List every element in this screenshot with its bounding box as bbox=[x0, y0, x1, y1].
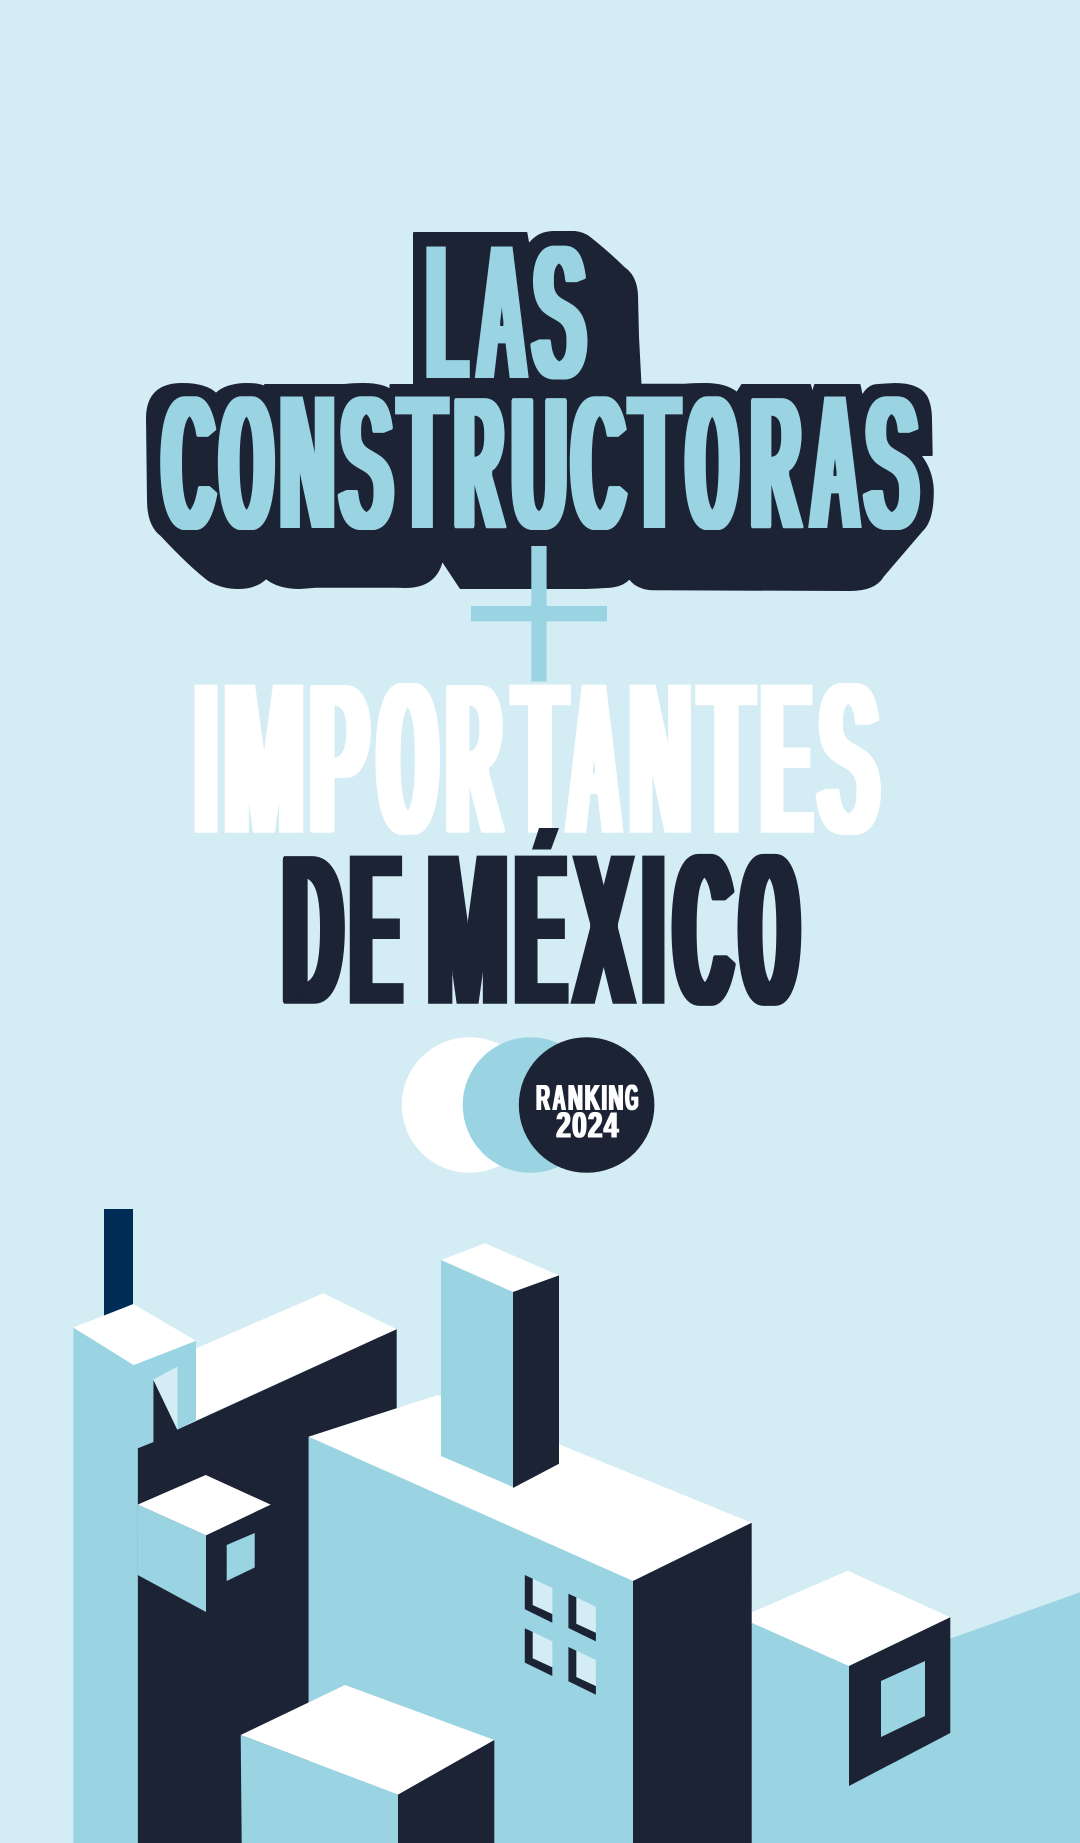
dark back building bbox=[138, 1329, 397, 1843]
title block: O bbox=[740, 822, 798, 1068]
title line: CONSTRUCTORAS: C bbox=[571, 366, 625, 585]
ranking badge: G bbox=[625, 1077, 638, 1118]
title line: LAS: A bbox=[478, 202, 526, 422]
plus sign bbox=[471, 546, 607, 682]
front building right face bbox=[398, 1740, 494, 1843]
small cube face bbox=[138, 1505, 206, 1612]
big central building bbox=[309, 1395, 752, 1843]
title line: CONSTRUCTORAS: R bbox=[454, 366, 502, 585]
ranking label: A bbox=[553, 1077, 566, 1118]
long white roof bbox=[190, 1293, 397, 1423]
accent mark bbox=[532, 828, 559, 850]
small cube bbox=[138, 1475, 271, 1612]
title line: CONSTRUCTORAS: S bbox=[341, 366, 392, 585]
window top right bbox=[568, 1594, 596, 1641]
title line: IMPORTANTES: T bbox=[514, 635, 566, 882]
title line: DE MÉXICO: X bbox=[575, 806, 633, 1053]
title line: IMPORTANTES: E bbox=[762, 635, 811, 882]
ground hill bbox=[700, 1592, 1080, 1843]
ranking label: 2 bbox=[556, 1105, 571, 1146]
title line: IMPORTANTES: T bbox=[700, 635, 752, 882]
window bottom left bbox=[525, 1628, 552, 1676]
big building right face bbox=[633, 1523, 752, 1843]
big building left face bbox=[309, 1437, 633, 1843]
windows grid bbox=[525, 1575, 596, 1695]
ranking badge bbox=[402, 1037, 654, 1173]
ranking label: 2 bbox=[588, 1105, 602, 1146]
title line: IMPORTANTES: N bbox=[630, 635, 690, 882]
window top left bbox=[525, 1575, 552, 1623]
title line: CONSTRUCTORAS: O bbox=[687, 366, 738, 585]
left tower window bbox=[153, 1367, 177, 1430]
front low building bbox=[241, 1685, 494, 1843]
title block: S bbox=[866, 366, 918, 585]
title line: IMPORTANTES: A bbox=[568, 635, 620, 882]
title line: CONSTRUCTORAS: O bbox=[220, 366, 273, 585]
title line: LAS: L bbox=[427, 202, 467, 422]
title line: DE MÉXICO: D bbox=[283, 822, 342, 1068]
title line: CONSTRUCTORAS: A bbox=[811, 352, 859, 572]
title line: CONSTRUCTORAS: R bbox=[751, 366, 800, 585]
left tower face bbox=[73, 1328, 196, 1843]
title line: CONSTRUCTORAS bbox=[160, 396, 920, 530]
title line: IMPORTANTES: I bbox=[195, 635, 217, 882]
title line: CONSTRUCTORAS: N bbox=[280, 352, 334, 572]
rooftop tower bbox=[441, 1243, 559, 1488]
title line: CONSTRUCTORAS: T bbox=[630, 352, 679, 572]
front building roof bbox=[241, 1685, 494, 1795]
title line: DE MÉXICO: É bbox=[516, 806, 566, 1053]
small cube window bbox=[227, 1533, 255, 1581]
ranking label: I bbox=[602, 1077, 607, 1118]
title line: IMPORTANTES: O bbox=[378, 651, 437, 897]
window bottom right bbox=[568, 1647, 596, 1695]
front building left face bbox=[241, 1735, 398, 1843]
title line: CONSTRUCTORAS: U bbox=[512, 366, 567, 585]
title line: DE MÉXICO: M bbox=[428, 806, 508, 1053]
title line: IMPORTANTES: R bbox=[447, 651, 500, 897]
light blue circle bbox=[463, 1037, 598, 1173]
ranking label: N bbox=[608, 1077, 623, 1118]
title line: CONSTRUCTORAS: C bbox=[162, 366, 215, 585]
title line: IMPORTANTES: P bbox=[310, 651, 368, 897]
title line: LAS bbox=[426, 246, 588, 380]
ranking label: R bbox=[536, 1077, 550, 1118]
title line: IMPORTANTES: M bbox=[224, 635, 304, 882]
ranking label: N bbox=[568, 1077, 583, 1118]
title line: DE MÉXICO: E bbox=[351, 806, 400, 1053]
right cube dark face bbox=[849, 1617, 950, 1786]
title shadow shape bbox=[147, 232, 933, 590]
title line: DE MÉXICO: I bbox=[644, 806, 663, 1053]
chimney bbox=[104, 1209, 133, 1319]
ranking label: 0 bbox=[572, 1105, 587, 1146]
title block: S bbox=[819, 651, 878, 897]
rooftop tower left face bbox=[441, 1260, 513, 1487]
rooftop tower roof bbox=[441, 1243, 559, 1292]
right cube roof bbox=[745, 1571, 950, 1666]
small cube roof bbox=[138, 1475, 271, 1535]
title line: DE MÉXICO bbox=[282, 854, 802, 1006]
right cube left face bbox=[745, 1620, 849, 1843]
left tower roof bbox=[73, 1304, 196, 1365]
title block: S bbox=[533, 215, 585, 434]
right cube window bbox=[881, 1661, 925, 1737]
title line: DE MÉXICO: C bbox=[674, 822, 732, 1068]
title line: IMPORTANTES bbox=[194, 683, 881, 835]
title line: CONSTRUCTORAS: T bbox=[399, 352, 446, 572]
isometric city illustration bbox=[73, 1209, 1080, 1843]
big building roof bbox=[309, 1395, 752, 1581]
white circle bbox=[402, 1037, 537, 1173]
right cube bbox=[745, 1571, 950, 1843]
left tower bbox=[73, 1304, 196, 1843]
dark circle bbox=[519, 1037, 654, 1173]
ranking label bbox=[536, 1077, 638, 1146]
title block bbox=[146, 231, 934, 1006]
ranking label: K bbox=[585, 1077, 600, 1118]
rooftop tower right face bbox=[513, 1275, 559, 1488]
ranking label: 4 bbox=[604, 1105, 618, 1146]
